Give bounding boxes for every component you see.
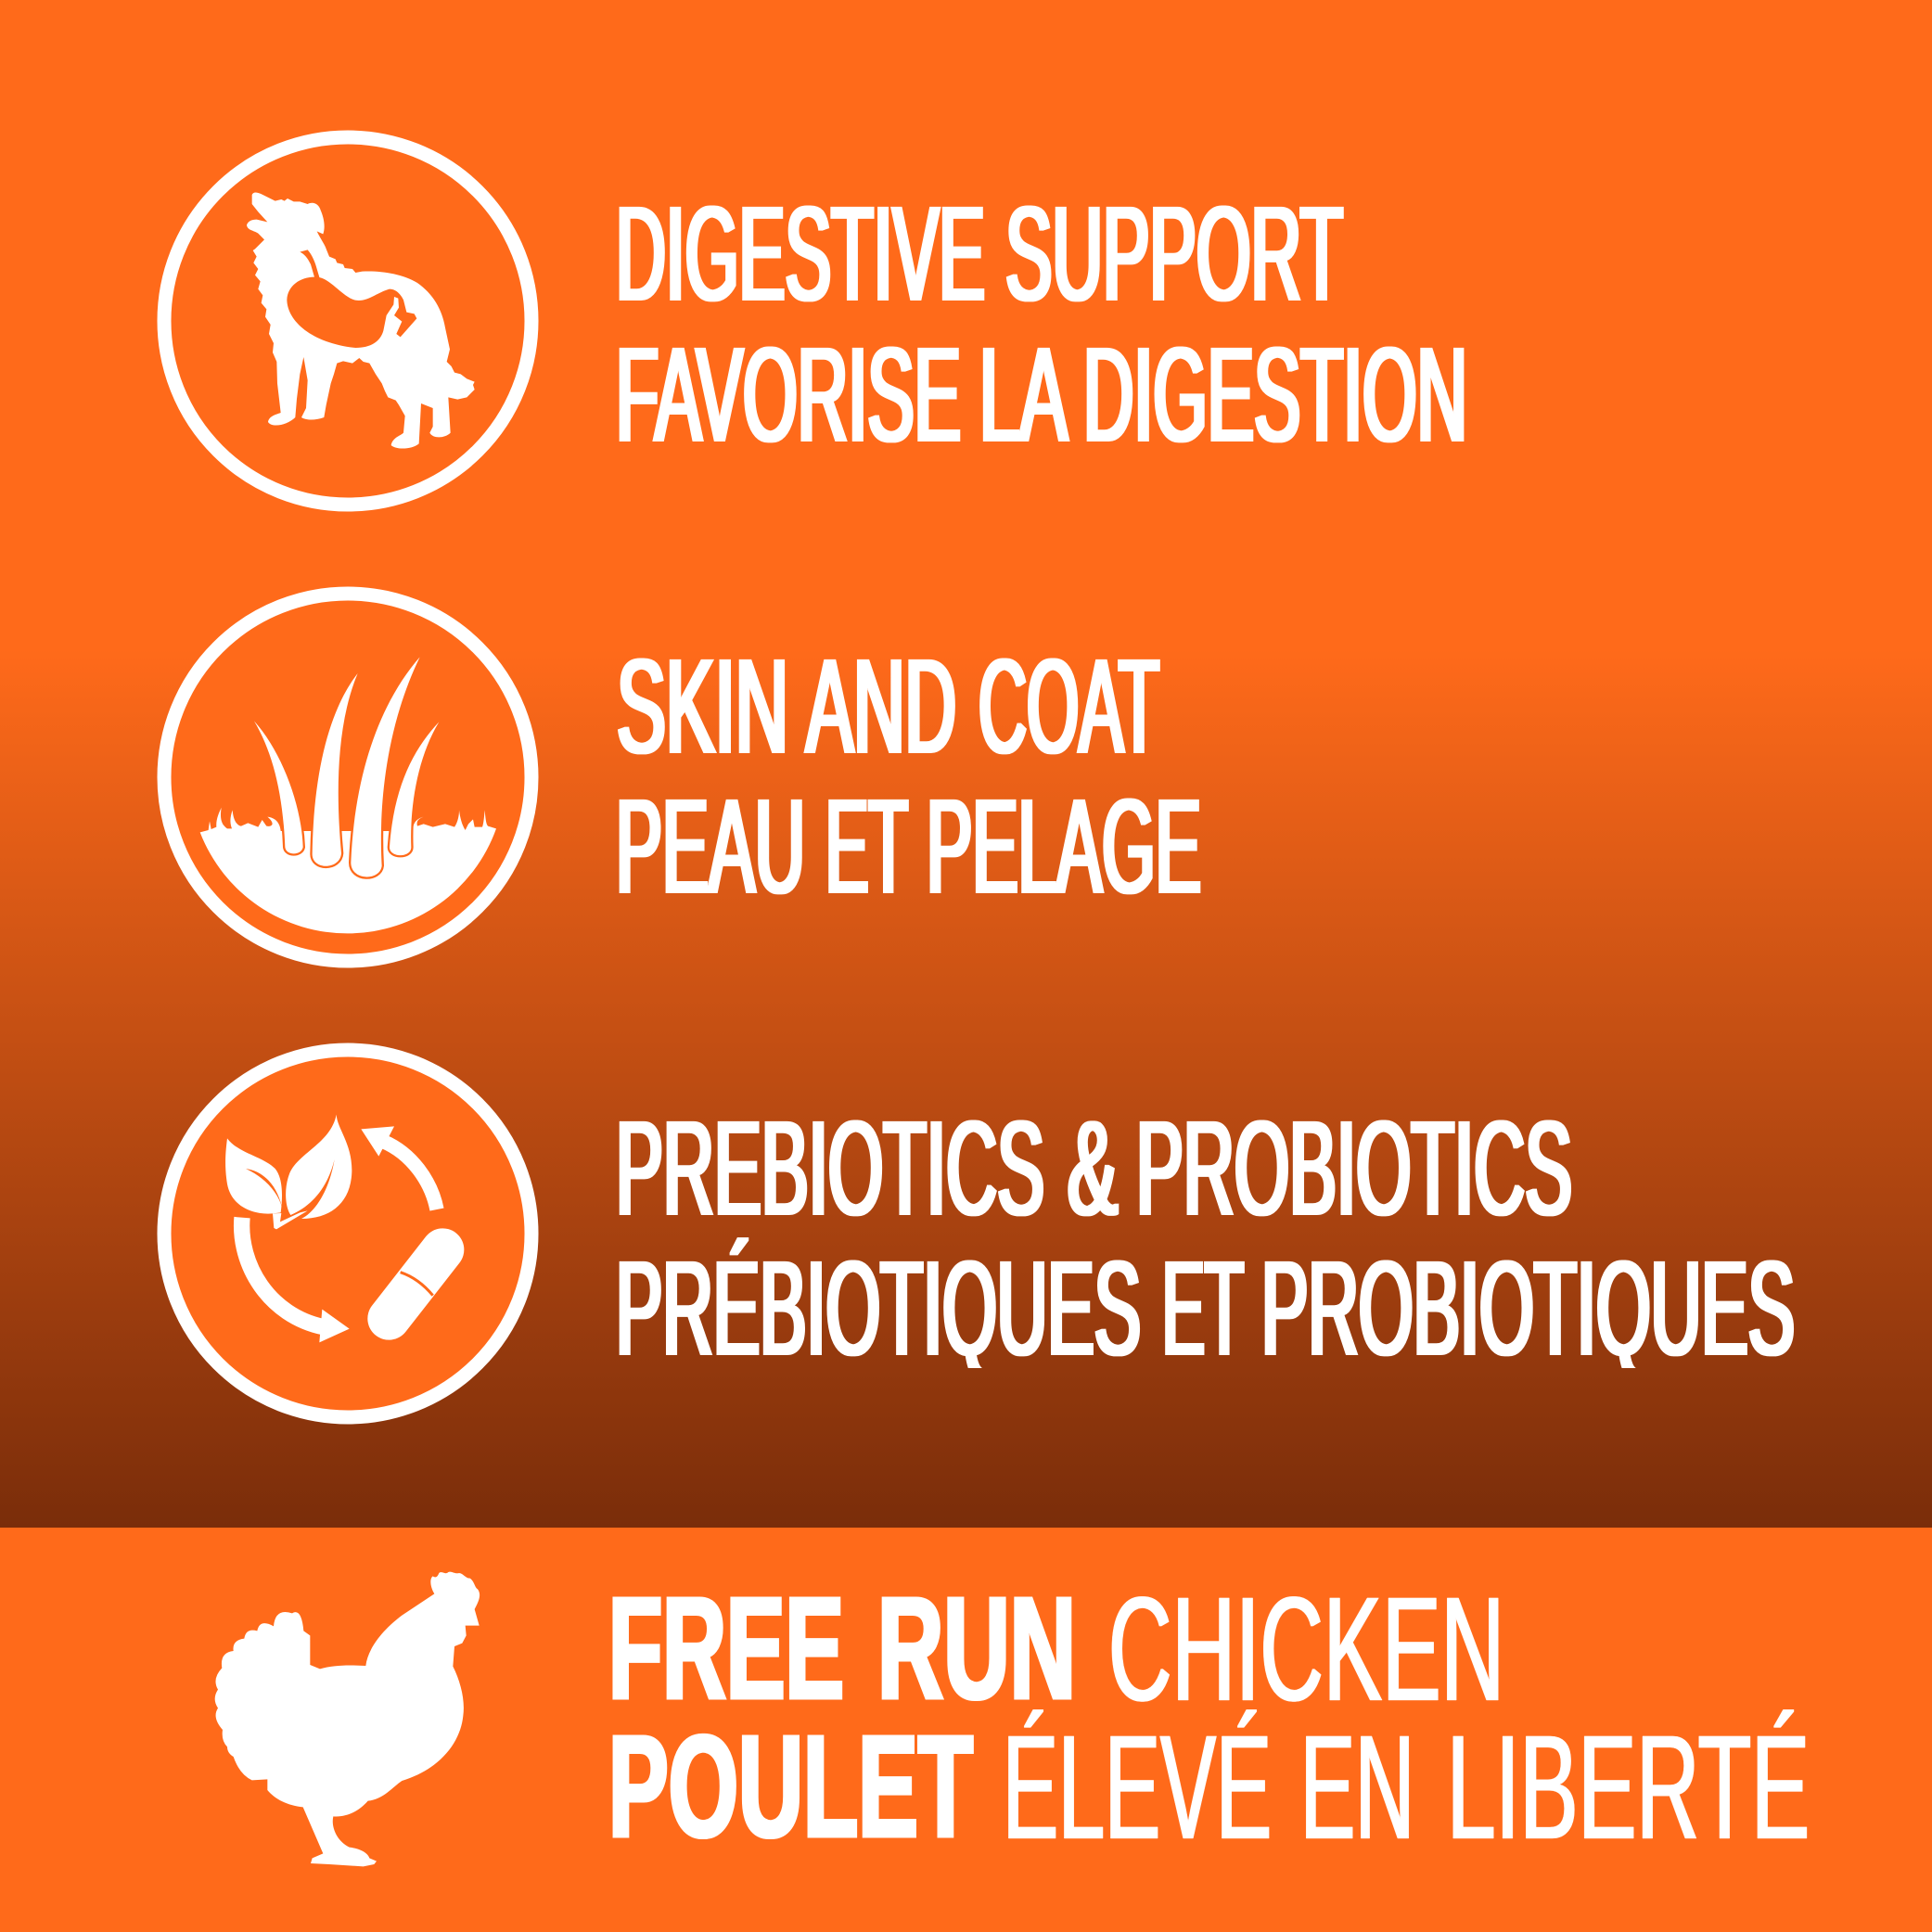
heading: digestive support: DIGESTIVE xyxy=(616,179,985,328)
panel: gradient background xyxy=(0,0,1932,1528)
heading: free run chicken: FREE xyxy=(608,1567,844,1730)
heading: skin and coat: SKIN xyxy=(617,632,788,781)
heading: prebiotics and probiotics: ET xyxy=(1162,1234,1244,1383)
heading: skin and coat: AND xyxy=(806,632,956,781)
heading: prebiotics and probiotics: & xyxy=(1068,1094,1118,1243)
heading: prebiotics and probiotics: PREBIOTICS xyxy=(616,1094,1044,1243)
heading: skin and coat: COAT xyxy=(979,632,1159,781)
heading: digestive support: SUPPORT xyxy=(1005,179,1343,328)
panel: chicken band xyxy=(0,1528,1932,1932)
heading: free run chicken: ÉLEVÉ xyxy=(1003,1704,1272,1870)
icon: chicken xyxy=(215,1572,480,1866)
heading: skin and coat: ET xyxy=(825,772,908,921)
heading: free run chicken xyxy=(608,1566,1810,1870)
heading: digestive support: LA xyxy=(979,320,1068,469)
heading: digestive support: FAVORISE xyxy=(616,320,961,469)
icon: hair follicles in skin xyxy=(164,594,531,961)
heading: skin and coat: PELAGE xyxy=(927,772,1201,921)
heading: prebiotics and probiotics: PRÉBIOTIQUES xyxy=(616,1234,1141,1383)
heading: skin and coat xyxy=(616,632,1201,921)
heading: digestive support: DIGESTION xyxy=(1083,320,1467,469)
heading: free run chicken: POULET xyxy=(608,1706,973,1868)
heading: free run chicken: EN xyxy=(1300,1704,1414,1870)
heading: free run chicken: RUN xyxy=(877,1567,1076,1730)
icon: dog with digestive system xyxy=(164,137,531,505)
icon: leaves and capsule cycle xyxy=(164,1050,531,1417)
heading: digestive support xyxy=(616,179,1467,469)
heading: prebiotics and probiotics xyxy=(616,1094,1795,1383)
heading: skin and coat: PEAU xyxy=(616,772,805,921)
heading: free run chicken: CHICKEN xyxy=(1108,1566,1504,1732)
